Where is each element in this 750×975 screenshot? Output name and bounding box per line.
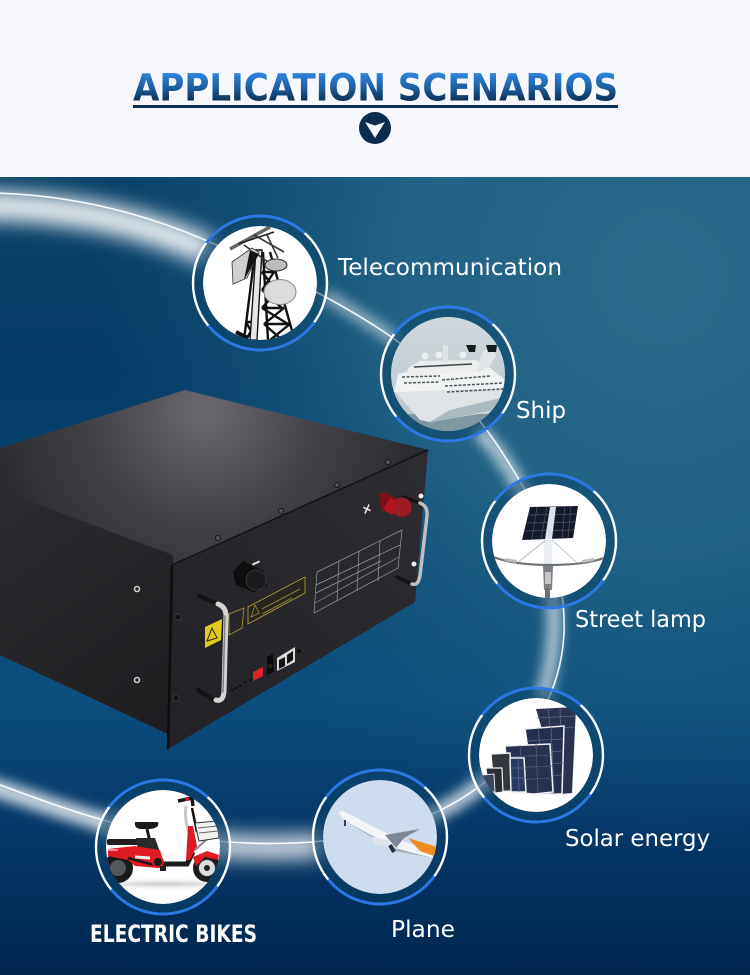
label: Street lamp: Street lamp [575, 607, 706, 633]
positive terminal red knob [361, 492, 412, 518]
title: application scenarios: APPLICATION SCENARIOS [133, 66, 618, 110]
battery top face [0, 390, 429, 566]
scenario: telecommunication [192, 214, 328, 352]
parameter table [314, 530, 402, 613]
scenario: street lamp [480, 472, 618, 610]
label: Ship: Ship [516, 398, 566, 424]
scenario: plane [312, 768, 448, 906]
ring: ship [354, 280, 542, 468]
right handle [397, 494, 427, 584]
scenario: solar energy [468, 686, 604, 824]
negative terminal knob [233, 560, 267, 592]
label: Plane: Plane [391, 917, 455, 943]
battery front panel [168, 450, 428, 749]
ring: plane [286, 743, 474, 931]
header background [0, 0, 750, 177]
top edge screws [216, 460, 390, 540]
high voltage label [229, 608, 244, 635]
label: Telecommunication: Telecommunication [337, 255, 562, 281]
yellow warning label [205, 619, 222, 648]
caution label [248, 577, 305, 624]
photo: solar street lamp [492, 484, 606, 600]
scenario: ship [380, 306, 516, 442]
photo: solar panels [479, 698, 593, 812]
photo: airliner [323, 780, 437, 894]
photo: red electric bike [103, 790, 221, 904]
ring: electric bikes [69, 753, 257, 941]
battery pack [0, 390, 429, 749]
photo: telecom tower [203, 226, 317, 340]
side screws [134, 586, 140, 682]
icon: down chevron badge [359, 112, 391, 144]
ring: solar energy [442, 661, 630, 849]
ring: telecommunication [166, 189, 354, 377]
left handle [198, 596, 226, 701]
glowing orbit arc [0, 193, 564, 848]
label: ELECTRIC BIKES: ELECTRIC BIKES [90, 920, 257, 948]
photo: cruise ship [390, 316, 506, 434]
ring: street lamp [455, 447, 643, 635]
label: Solar energy: Solar energy [565, 826, 710, 852]
battery side face [0, 490, 173, 735]
scenario: electric bikes [94, 778, 232, 916]
control ports [231, 647, 301, 691]
